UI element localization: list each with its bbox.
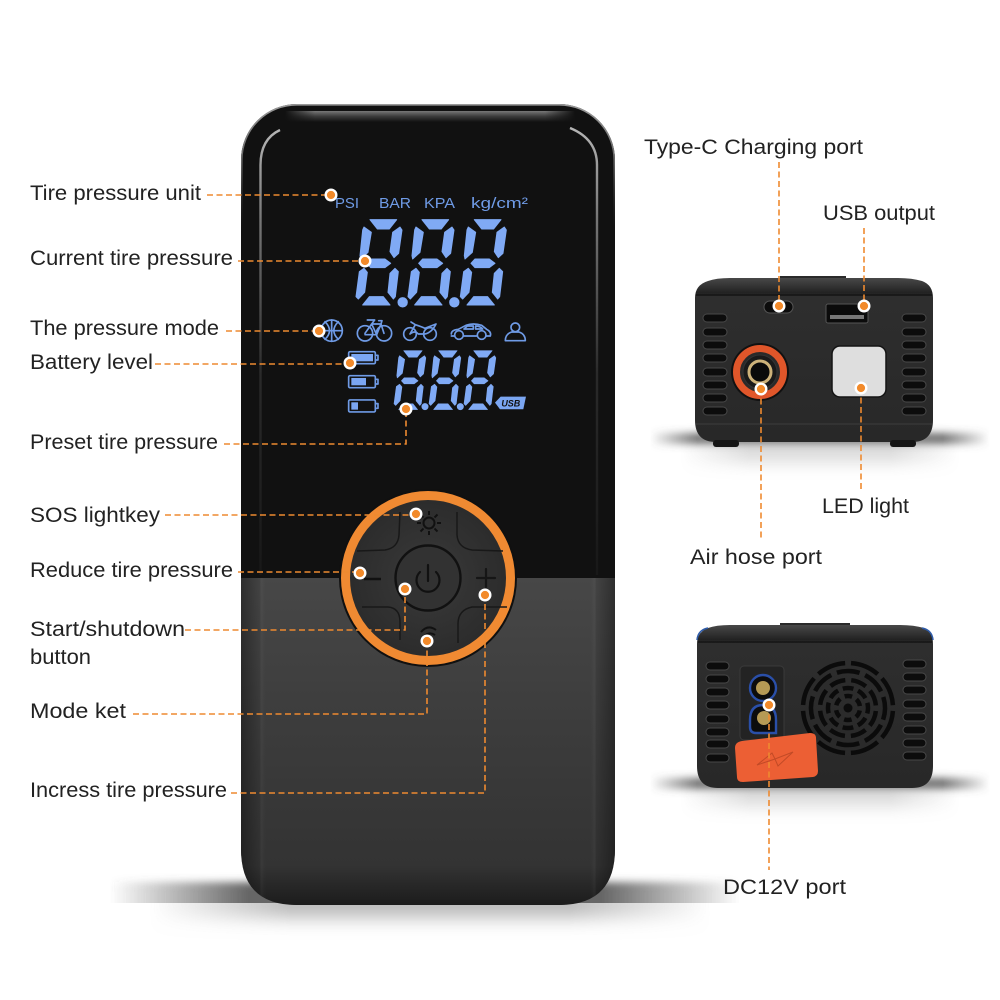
large pressure digits xyxy=(356,220,506,307)
callout: Current tire pressure xyxy=(30,246,370,270)
pressure unit labels xyxy=(335,195,528,212)
callout: Current tire pressure: Current tire pressure xyxy=(30,246,233,270)
callout: Type-C Charging port xyxy=(644,135,863,311)
callout: Type-C Charging port: Type-C Charging port xyxy=(644,135,863,159)
icon: motorcycle xyxy=(404,322,436,340)
USB-C port xyxy=(764,301,793,313)
callout: The pressure mode xyxy=(30,316,324,340)
icon: mode xyxy=(421,627,436,637)
callout: Incress tire pressure xyxy=(30,590,490,802)
callout: Reduce tire pressure xyxy=(30,558,365,582)
callout: Battery level: Battery level xyxy=(30,350,153,374)
DC12V connector panel xyxy=(740,666,784,740)
USB tag xyxy=(495,397,526,409)
callout: DC12V port: DC12V port xyxy=(723,875,846,899)
body xyxy=(697,625,933,788)
body xyxy=(695,278,933,442)
callout: LED light: LED light xyxy=(822,494,909,518)
callout: Air hose port xyxy=(690,384,822,569)
callout: Start/shutdown button: button xyxy=(30,645,91,669)
callout: Start/shutdown button xyxy=(30,584,410,669)
shadows under the devices xyxy=(110,433,990,922)
callout: USB output: USB output xyxy=(823,201,935,225)
LCD display xyxy=(321,220,526,412)
USB-A port xyxy=(826,304,868,323)
icon: bicycle xyxy=(357,320,392,341)
orange rubber cap xyxy=(735,733,818,782)
side device: port side xyxy=(695,276,933,447)
callout: Battery level xyxy=(30,350,355,374)
pressure unit labels: PSI xyxy=(335,195,359,212)
pressure unit labels: KPA xyxy=(424,195,455,212)
vents xyxy=(706,660,926,762)
fan grille xyxy=(800,660,896,756)
icon: plus xyxy=(477,569,495,587)
callout: Air hose port: Air hose port xyxy=(690,545,822,569)
top gloss rim xyxy=(285,111,575,122)
callout: Tire pressure unit xyxy=(30,181,336,205)
power button xyxy=(396,546,460,610)
callout: Mode ket xyxy=(30,636,432,723)
callout: DC12V port xyxy=(723,700,846,899)
preset pressure digits xyxy=(394,351,496,410)
callout: SOS lightkey xyxy=(30,503,421,527)
icon: minus xyxy=(364,578,381,580)
USB tag: USB xyxy=(501,399,521,409)
lower body panel xyxy=(241,578,615,905)
callout: Tire pressure unit: Tire pressure unit xyxy=(30,181,201,205)
callout: Reduce tire pressure: Reduce tire pressure xyxy=(30,558,233,582)
body shell xyxy=(241,104,615,905)
callout: USB output xyxy=(823,201,935,311)
callout: SOS lightkey: SOS lightkey xyxy=(30,503,160,527)
callout: The pressure mode: The pressure mode xyxy=(30,316,219,340)
pressure unit labels: BAR xyxy=(379,195,411,212)
air hose port xyxy=(731,343,789,401)
side device: fan side xyxy=(697,623,933,788)
callout: Start/shutdown button: Start/shutdown xyxy=(30,617,185,641)
callout: Incress tire pressure: Incress tire pressure xyxy=(30,778,227,802)
callout: LED light xyxy=(822,383,909,518)
icon: person xyxy=(505,323,525,341)
icon: sun xyxy=(417,511,441,535)
feet xyxy=(713,440,916,447)
icon: basketball xyxy=(321,320,342,341)
callout: Preset tire pressure: Preset tire pressure xyxy=(30,430,218,454)
LED light xyxy=(832,346,886,397)
callout: Mode ket: Mode ket xyxy=(30,699,126,723)
pressure unit labels: kg/cm² xyxy=(471,195,528,212)
screen bezel highlight xyxy=(260,130,280,575)
control button ring xyxy=(339,489,517,667)
vents xyxy=(703,314,926,415)
main device front view xyxy=(241,104,615,905)
icon: car xyxy=(451,324,491,339)
battery icons xyxy=(349,352,378,412)
callout: Preset tire pressure xyxy=(30,404,411,454)
